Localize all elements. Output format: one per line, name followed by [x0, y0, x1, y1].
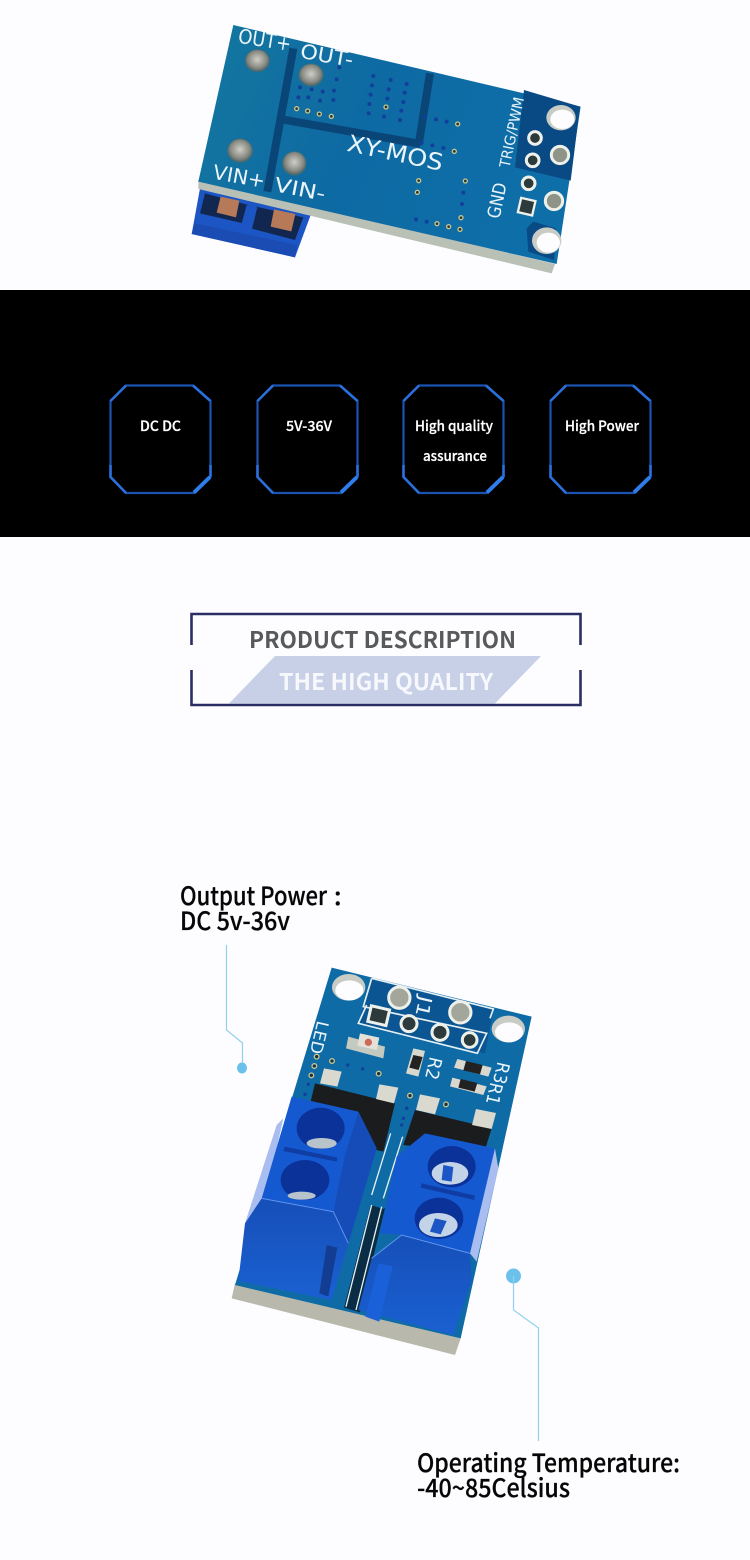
silkscreen labels: XY-MOS — [345, 129, 446, 177]
blue screw terminal — [192, 188, 311, 257]
octagon frame — [110, 386, 210, 493]
leader line — [226, 945, 242, 1068]
top product photo: XY-MOS board underside — [192, 24, 581, 273]
leader dot — [237, 1062, 247, 1074]
callout text: -40~85Celsius — [417, 1469, 570, 1505]
octagon frame — [404, 386, 504, 493]
header pads — [368, 987, 477, 1047]
octagon frame — [258, 386, 358, 493]
board substrate and silver edge — [198, 25, 581, 273]
silkscreen labels: VIN+ — [211, 160, 267, 193]
silkscreen labels: R1 — [481, 1081, 506, 1107]
board substrate and silver edge — [232, 968, 532, 1355]
silkscreen labels — [211, 24, 528, 220]
centre slot — [344, 1133, 404, 1312]
silkscreen labels: OUT- — [298, 39, 355, 72]
silkscreen labels: R2 — [420, 1055, 446, 1082]
feature badge: DC DC — [110, 386, 210, 493]
mounting holes — [532, 105, 576, 254]
leader line — [514, 1276, 538, 1441]
bright corner — [487, 477, 503, 492]
bright corner — [634, 477, 650, 492]
silkscreen labels: TRIG/PWM — [496, 96, 528, 170]
black feature band — [0, 290, 750, 537]
octagon frame — [550, 386, 650, 493]
feature badge: High Power — [550, 386, 650, 493]
label: assurance — [423, 446, 487, 466]
silkscreen labels — [306, 993, 513, 1107]
callout: output power — [180, 877, 341, 1074]
corner highlights — [404, 386, 504, 493]
copper separation traces — [267, 48, 430, 192]
resistors — [406, 1048, 492, 1095]
gold test points — [309, 1054, 448, 1107]
bright corner — [194, 477, 210, 492]
right blue terminal — [358, 1133, 498, 1335]
silkscreen labels: R3 — [488, 1060, 513, 1086]
LED — [346, 1033, 385, 1058]
silkscreen labels: LED — [306, 1019, 332, 1056]
header outline — [358, 978, 493, 1053]
bright corner — [341, 477, 357, 492]
feature badge: High quality assurance — [404, 386, 504, 493]
silkscreen labels: VIN- — [272, 172, 328, 206]
vias — [296, 65, 465, 224]
callout text: Output Power — [180, 877, 328, 913]
callout text: Operating Temperature: — [417, 1444, 680, 1480]
heading text: PRODUCT DESCRIPTION — [249, 621, 516, 655]
mounting holes — [332, 974, 525, 1042]
callout text: DC 5v-36v — [180, 902, 290, 938]
label: DC DC — [140, 416, 181, 436]
header pads — [518, 132, 569, 215]
label: 5V-36V — [286, 416, 333, 436]
feature badge: 5V-36V — [258, 386, 358, 493]
corner highlights — [550, 386, 650, 493]
lower product photo: MOSFET module top view — [232, 968, 532, 1355]
MOSFET left — [303, 1068, 398, 1152]
gold test points — [295, 105, 467, 231]
small vias — [303, 1063, 408, 1127]
label: High Power — [565, 416, 639, 436]
leader dot — [506, 1268, 521, 1284]
heading frame — [192, 614, 580, 705]
label: High quality — [415, 416, 493, 436]
corner highlights — [110, 386, 210, 493]
left blue terminal — [238, 1097, 377, 1300]
silkscreen labels: GND — [484, 181, 512, 220]
callout: operating temperature — [417, 1268, 680, 1505]
section heading: product description — [192, 614, 580, 705]
silkscreen labels: J1 — [410, 993, 436, 1019]
silkscreen labels: OUT+ — [237, 24, 293, 56]
corner highlights — [258, 386, 358, 493]
ribbon — [229, 656, 541, 704]
screw heads — [227, 49, 323, 175]
subheading text: THE HIGH QUALITY — [279, 663, 494, 697]
MOSFET right — [403, 1094, 496, 1155]
callout text: : — [334, 877, 341, 913]
